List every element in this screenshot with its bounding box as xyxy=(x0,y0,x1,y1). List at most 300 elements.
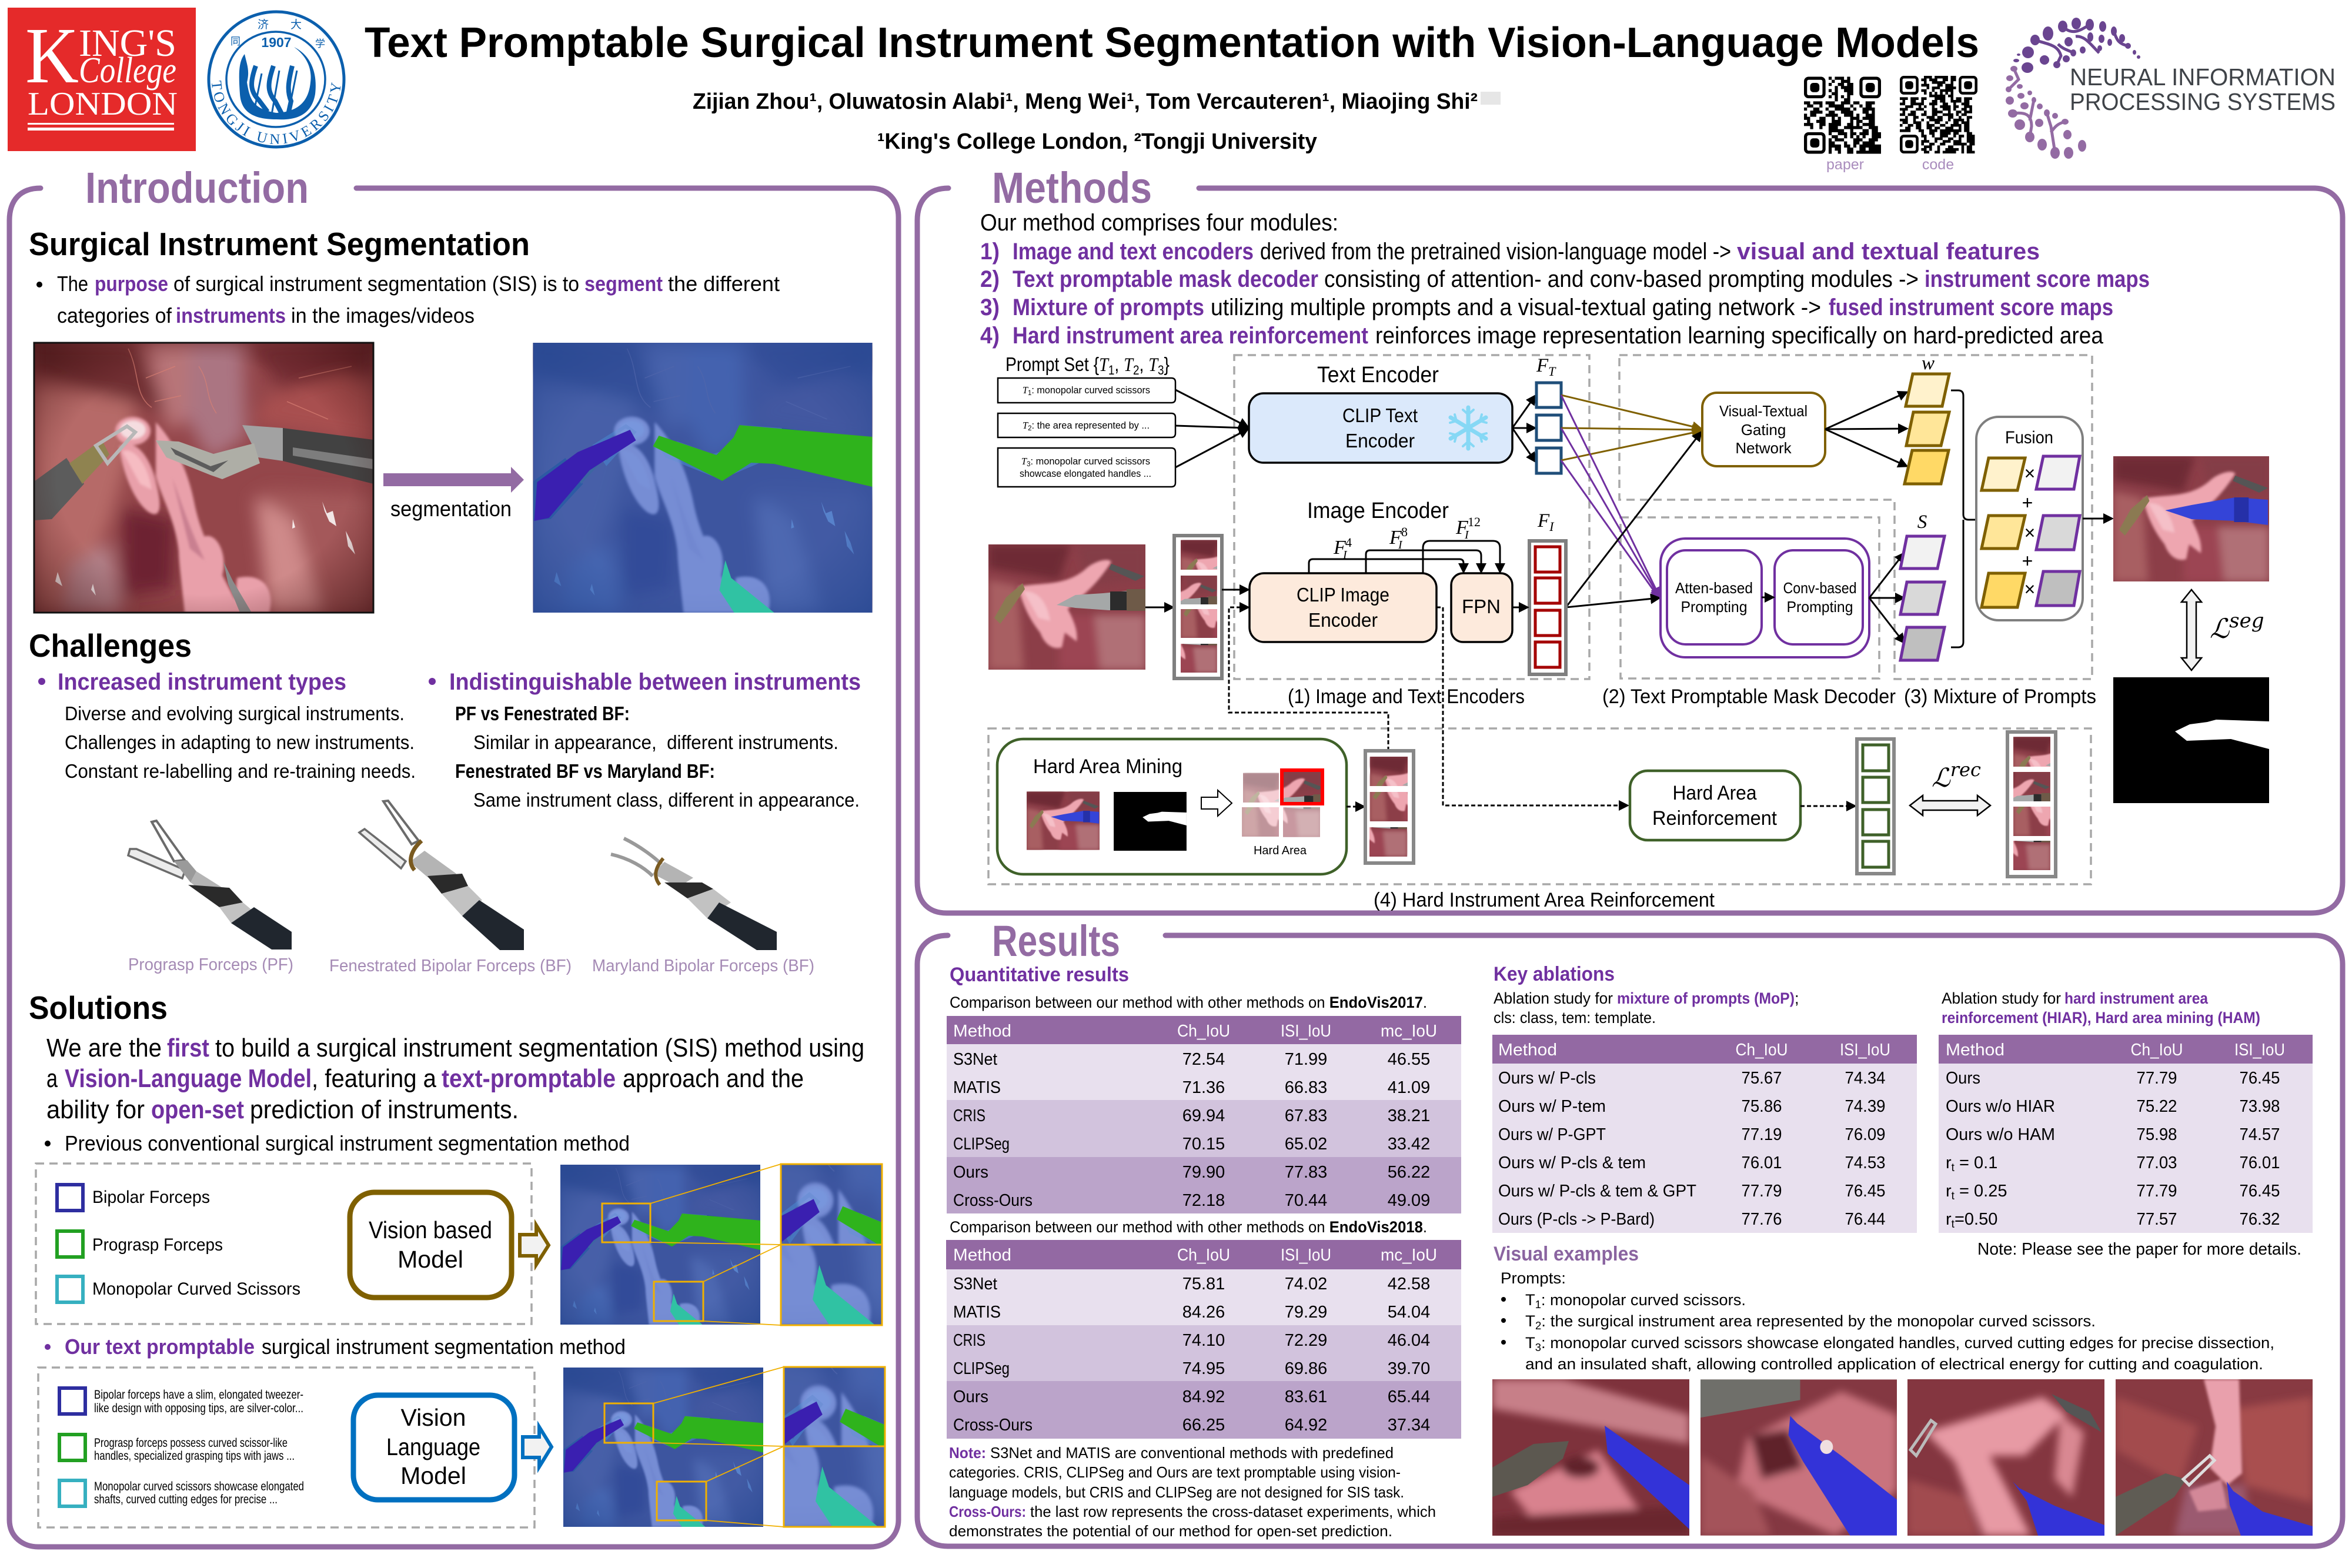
table: HIAR ablation: 75.22 xyxy=(2137,1097,2177,1116)
logo: Tongji University seal: 济 xyxy=(258,16,269,32)
table: HIAR ablation xyxy=(1939,1035,2313,1233)
table: EndoVis2017 xyxy=(947,1016,1461,1213)
logo: King's College London xyxy=(8,8,196,151)
table: HIAR ablation: t xyxy=(1952,1218,1955,1231)
text: purpose bullet: purpose xyxy=(95,272,168,296)
logo: King's College London: K xyxy=(25,12,79,100)
caption: HIAR ablation: reinforcement (HIAR), Hard area mining (HAM) xyxy=(1942,1009,2260,1027)
panel outline xyxy=(917,188,2343,913)
legend: conventional classes xyxy=(57,1185,300,1302)
label: prompt set: , xyxy=(1114,353,1124,375)
affiliations: ¹King's College London, ²Tongji University xyxy=(877,129,1317,154)
table: EndoVis2018: ISI_IoU xyxy=(1281,1246,1331,1265)
table: EndoVis2017: Cross-Ours xyxy=(953,1191,1033,1210)
text: indistinguishable between instruments: Same instrument class, different in appearance. xyxy=(473,789,860,811)
image: visual example 2 xyxy=(1700,1379,1897,1536)
text: module list: Image and text encoders xyxy=(1013,239,1254,265)
logo: King's College London: ING'S xyxy=(79,22,176,65)
arrow: mining to crops xyxy=(1347,805,1364,808)
table: MoP ablation: Ours w/ P-cls & tem xyxy=(1498,1154,1646,1172)
logo: King's College London: College xyxy=(79,51,176,91)
score maps S xyxy=(1900,536,1945,660)
arrow: fusion to prediction xyxy=(2083,517,2112,520)
image: conventional segmentation with zooms xyxy=(560,1015,1058,1425)
legend: text prompts: like design with opposing tips, are silver-color... xyxy=(94,1402,303,1415)
legend: text prompts xyxy=(59,1388,304,1506)
table: EndoVis2018: 83.61 xyxy=(1285,1388,1327,1406)
text: solution summary: Vision-Language Model xyxy=(65,1064,312,1093)
caption: HIAR ablation xyxy=(1942,989,2260,1027)
table: EndoVis2018: Cross-Ours xyxy=(953,1416,1033,1435)
text: prompts list xyxy=(1501,1269,2274,1373)
legend: text prompts: Bipolar forceps have a slim, elongated tweezer- xyxy=(94,1388,303,1402)
table: EndoVis2018: CLIPSeg xyxy=(953,1359,1010,1378)
arrow: reinforcement to features xyxy=(1800,805,1855,807)
box: fusion: × xyxy=(2024,463,2035,484)
text: purpose bullet: categories of xyxy=(57,303,172,327)
table: EndoVis2017: 69.94 xyxy=(1182,1106,1225,1125)
legend: conventional classes: Prograsp Forceps xyxy=(92,1235,223,1255)
box: visual-textual gating network xyxy=(1702,393,1825,466)
box: prompting modules: Conv-based xyxy=(1783,579,1857,597)
table: EndoVis2018: 64.92 xyxy=(1285,1416,1327,1435)
table: EndoVis2017: 71.99 xyxy=(1285,1050,1327,1069)
text: solution summary: a xyxy=(46,1064,58,1093)
crop stack xyxy=(1144,536,1254,678)
prompt texts: showcase elongated handles ... xyxy=(1020,468,1151,479)
feature stack: reinforcement xyxy=(1857,739,1894,874)
table: HIAR ablation: Ours xyxy=(1946,1069,1980,1088)
text: indistinguishable between instruments: Similar in appearance, different instruments. xyxy=(473,731,838,753)
text: solution summary: approach and the xyxy=(623,1064,804,1093)
diagram: conventional method xyxy=(36,1164,549,1324)
arrow: FPN to features xyxy=(1512,607,1528,608)
labels: multi-scale features: F xyxy=(1389,527,1402,549)
table: MoP ablation: Ours w/ P-cls & tem & GPT xyxy=(1498,1182,1696,1201)
label: image encoder: Image Encoder xyxy=(1307,499,1449,523)
table: HIAR ablation: 75.98 xyxy=(2137,1125,2177,1144)
labels: forceps types: Maryland Bipolar Forceps (BF) xyxy=(592,957,814,975)
text: solution summary: open-set xyxy=(151,1095,244,1124)
label: L seg: ℒ xyxy=(2210,613,2229,644)
brace xyxy=(1951,390,1976,647)
label: prompt set: T xyxy=(1148,355,1159,376)
text: results note: demonstrates the potential of our method for open-set prediction. xyxy=(949,1522,1392,1540)
panel: Results xyxy=(917,917,2343,1546)
logo: Neural Information Processing Systems: PROCESSING SYSTEMS xyxy=(2070,88,2336,115)
table: MoP ablation: 76.44 xyxy=(1845,1210,1885,1229)
prompt texts: : monopolar curved scissors xyxy=(1031,385,1150,396)
table: HIAR ablation: r xyxy=(1946,1210,1952,1229)
labels: module captions xyxy=(1288,686,2096,708)
table: EndoVis2017: 49.09 xyxy=(1388,1191,1430,1210)
table: EndoVis2018: 74.95 xyxy=(1182,1359,1225,1378)
prompt texts: T xyxy=(1023,420,1029,431)
arrows: prompts to text encoder xyxy=(1175,390,1248,467)
caption: EndoVis2017: Comparison between our method with other methods on EndoVis2017. xyxy=(950,994,1427,1011)
table: EndoVis2018: 72.29 xyxy=(1285,1331,1327,1350)
lines: text features to prompting xyxy=(1561,395,1659,599)
text: purpose bullet: the different xyxy=(668,272,780,296)
text: module list: Our method comprises four modules: xyxy=(980,210,1338,236)
table: MoP ablation: 74.39 xyxy=(1845,1097,1885,1116)
illustration: Maryland Bipolar Forceps xyxy=(611,838,777,950)
caption: EndoVis2018: Comparison between our method with other methods on EndoVis2018. xyxy=(950,1218,1427,1236)
text: our method bullet xyxy=(45,1335,626,1359)
table: MoP ablation: 74.53 xyxy=(1845,1154,1885,1172)
table: EndoVis2017: MATIS xyxy=(953,1078,1001,1097)
caption: MoP ablation: mixture of prompts (MoP) xyxy=(1617,989,1795,1007)
box: vision language model: Language xyxy=(386,1433,480,1460)
logo: Tongji University seal: 大 xyxy=(290,16,302,32)
table: MoP ablation: 74.34 xyxy=(1845,1069,1885,1088)
table: EndoVis2017: 71.36 xyxy=(1182,1078,1225,1097)
table: EndoVis2017: 66.83 xyxy=(1285,1078,1327,1097)
text: indistinguishable between instruments: Indistinguishable between instruments xyxy=(449,669,861,695)
text: prompts list: 3 xyxy=(1535,1342,1541,1353)
box: vision language model: Vision xyxy=(401,1404,466,1431)
table: EndoVis2017: 70.44 xyxy=(1285,1191,1327,1210)
logo: Tongji University seal: 1907 xyxy=(261,35,292,50)
text: module list xyxy=(980,210,2150,349)
table: MoP ablation: 77.79 xyxy=(1742,1182,1782,1201)
table: MoP ablation: 77.19 xyxy=(1742,1125,1782,1144)
table: HIAR ablation: Method xyxy=(1946,1041,2004,1059)
heading: Key ablations: Key ablations xyxy=(1494,963,1615,985)
box: hard area reinforcement: Hard Area xyxy=(1672,782,1757,804)
text: our method bullet: Our text promptable xyxy=(65,1335,255,1359)
image: visual example 3 xyxy=(1907,1379,2104,1536)
legend: text prompts: handles, specialized grasping tips with jaws ... xyxy=(94,1449,295,1463)
arrow: crops to encoder xyxy=(1222,589,1248,590)
text: our method bullet: surgical instrument segmentation method xyxy=(262,1335,626,1359)
box: visual-textual gating network: Visual-Textual xyxy=(1719,402,1808,420)
labels: multi-scale features: F xyxy=(1333,537,1347,559)
arrow: image to crops xyxy=(1145,607,1173,608)
text: module list: Hard instrument area reinforcement xyxy=(1013,323,1368,349)
prompt texts: T xyxy=(1021,456,1028,467)
table: HIAR ablation: r xyxy=(1946,1182,1952,1201)
table: EndoVis2017: CRIS xyxy=(953,1106,985,1125)
title: Text Promptable Surgical Instrument Segmentation with Vision-Language Models xyxy=(365,19,1979,66)
labels: multi-scale features: I xyxy=(1464,529,1469,541)
labels: multi-scale features xyxy=(1333,514,1481,561)
text: solution summary xyxy=(46,1034,864,1124)
text: purpose bullet: The xyxy=(57,272,88,296)
label: F_I: I xyxy=(1549,519,1555,534)
table: EndoVis2017: Ch_IoU xyxy=(1177,1022,1230,1041)
box: fusion: + xyxy=(2022,550,2033,571)
label: module 4 caption: (4) Hard Instrument Area Reinforcement xyxy=(1374,889,1715,911)
table: EndoVis2017: mc_IoU xyxy=(1381,1022,1437,1041)
box: hard area reinforcement xyxy=(1630,771,1800,840)
lines: text features to gating network xyxy=(1561,395,1701,460)
table: EndoVis2017: ISI_IoU xyxy=(1281,1022,1331,1041)
text: module list: 2) xyxy=(980,266,1000,292)
box: vision based model: Model xyxy=(397,1246,463,1273)
box: vision language model xyxy=(353,1395,514,1500)
table: HIAR ablation: =0.50 xyxy=(1955,1210,1997,1229)
heading: Visual examples: Visual examples xyxy=(1494,1243,1639,1265)
box: vision language model: Model xyxy=(400,1462,466,1489)
labels: multi-scale features: F xyxy=(1455,517,1469,539)
table: HIAR ablation: 76.45 xyxy=(2239,1069,2280,1088)
illustration: Fenestrated Bipolar Forceps xyxy=(359,801,524,950)
table: EndoVis2018: 75.81 xyxy=(1182,1275,1225,1293)
text: purpose bullet: in the images/videos xyxy=(291,303,475,327)
image: visual example 1 xyxy=(1492,1379,1689,1536)
QR labels xyxy=(1826,156,1954,173)
labels: multi-scale features: 8 xyxy=(1401,524,1408,539)
table: MoP ablation: 75.86 xyxy=(1742,1097,1782,1116)
label: prompt set: } xyxy=(1164,353,1170,375)
prompt texts: T xyxy=(1023,385,1028,396)
weight maps w xyxy=(1905,374,1949,484)
text: solution summary: , featuring a xyxy=(312,1064,436,1093)
text: increased instrument types: Diverse and evolving surgical instruments. xyxy=(65,703,405,724)
text: indistinguishable between instruments: PF vs Fenestrated BF: xyxy=(455,703,630,724)
table: HIAR ablation: 77.57 xyxy=(2137,1210,2177,1229)
table: MoP ablation: Ours w/ P-tem xyxy=(1498,1097,1606,1116)
labels: multi-scale features: 12 xyxy=(1468,514,1481,529)
label: L rec: rec xyxy=(1950,758,1981,781)
label: prompt set: 3 xyxy=(1158,363,1164,377)
image: segmented scene xyxy=(533,343,873,613)
table: EndoVis2018: 84.26 xyxy=(1182,1303,1225,1322)
panel outline xyxy=(917,935,2343,1546)
table: EndoVis2018: 65.44 xyxy=(1388,1388,1430,1406)
table: HIAR ablation: 73.98 xyxy=(2239,1097,2280,1116)
caption: MoP ablation xyxy=(1494,989,1799,1027)
table: EndoVis2017: Method xyxy=(953,1022,1011,1041)
feature squares: F_T xyxy=(1536,383,1561,473)
table: EndoVis2017: CLIPSeg xyxy=(953,1135,1010,1154)
text: solution summary: ability for xyxy=(46,1095,145,1124)
text: solution summary: We are the xyxy=(46,1034,162,1062)
text: increased instrument types: Increased instrument types xyxy=(58,669,346,695)
table: EndoVis2017: 38.21 xyxy=(1388,1106,1430,1125)
arrows: text encoder to features xyxy=(1512,396,1535,462)
table: HIAR ablation: 74.57 xyxy=(2239,1125,2280,1144)
text: prompts list: 1 xyxy=(1535,1299,1541,1310)
table: MoP ablation: 76.45 xyxy=(1845,1182,1885,1201)
label: prompt set: Prompt Set {T xyxy=(1005,353,1114,376)
table: EndoVis2017: Ours xyxy=(953,1163,988,1182)
table: EndoVis2018: 37.34 xyxy=(1388,1416,1430,1435)
heading: Challenges: Challenges xyxy=(29,627,192,664)
image: input scene xyxy=(988,544,1145,670)
table: EndoVis2017: 33.42 xyxy=(1388,1135,1430,1154)
label: prompt set: , xyxy=(1139,353,1148,375)
image: ground-truth mask xyxy=(2113,677,2269,803)
labels: forceps types: Fenestrated Bipolar Forceps (BF) xyxy=(329,957,572,975)
authors: Zijian Zhou¹, Oluwatosin Alabi¹, Meng Wei¹, Tom Vercauteren¹, Miaojing Shi² xyxy=(693,89,1478,114)
caption: MoP ablation: Ablation study for xyxy=(1494,989,1613,1007)
labels: multi-scale features: 4 xyxy=(1345,535,1352,550)
box: fusion: × xyxy=(2024,522,2035,543)
text: module list: reinforces image representation learning specifically on hard-predicted area xyxy=(1375,323,2104,349)
table: HIAR ablation: 76.01 xyxy=(2239,1154,2280,1172)
box: prompting modules: Prompting xyxy=(1681,598,1748,616)
table: HIAR ablation: Ch_IoU xyxy=(2131,1041,2183,1059)
crop stack: hard area xyxy=(1333,751,1444,863)
illustration: Prograsp Forceps xyxy=(128,821,292,950)
table: MoP ablation: 75.67 xyxy=(1742,1069,1782,1088)
table: EndoVis2018: Method xyxy=(953,1246,1011,1265)
text: module list: fused instrument score maps xyxy=(1829,295,2113,320)
table: HIAR ablation: t xyxy=(1952,1162,1955,1174)
text: prompts list: T xyxy=(1525,1312,1535,1330)
legend: text prompts: Prograsp forceps possess curved scissor-like xyxy=(94,1436,288,1450)
text: results note: the last row represents the cross-dataset experiments, which xyxy=(1030,1503,1436,1520)
box: fusion: × xyxy=(2024,579,2035,600)
table: EndoVis2018: 54.04 xyxy=(1388,1303,1430,1322)
table: HIAR ablation: = 0.25 xyxy=(1955,1182,2007,1201)
prompt texts: 1 xyxy=(1028,389,1032,397)
labels: module captions: (2) Text Promptable Mask Decoder xyxy=(1602,686,1896,708)
table: EndoVis2018: S3Net xyxy=(953,1275,997,1293)
labels: module captions: (3) Mixture of Prompts xyxy=(1904,686,2096,708)
QR labels: paper xyxy=(1826,156,1864,173)
box: fusion: + xyxy=(2022,492,2033,513)
table: EndoVis2018: Ch_IoU xyxy=(1177,1246,1230,1265)
label: F_I: F xyxy=(1538,510,1549,531)
text: module list: 1) xyxy=(980,239,1000,265)
table: EndoVis2018: 42.58 xyxy=(1388,1275,1430,1293)
labels: forceps types: Prograsp Forceps (PF) xyxy=(128,955,293,974)
image: text promptable segmentation with zooms xyxy=(563,1216,1061,1568)
table: EndoVis2017: 72.54 xyxy=(1182,1050,1225,1069)
image: prediction output xyxy=(2113,456,2269,581)
table: EndoVis2017: 46.55 xyxy=(1388,1050,1430,1069)
caption: HIAR ablation: Ablation study for xyxy=(1942,989,2061,1007)
box: hard area mining: Hard Area Mining xyxy=(1033,755,1182,778)
box: vision based model: Vision based xyxy=(369,1216,492,1243)
text: increased instrument types xyxy=(38,669,416,782)
box: CLIP image encoder xyxy=(1250,573,1436,642)
logo: Tongji University seal: 同 xyxy=(230,33,240,48)
text: module list: derived from the pretrained vision-language model -> xyxy=(1260,239,1731,265)
table: MoP ablation: Ch_IoU xyxy=(1736,1041,1788,1059)
panel: Methods xyxy=(917,163,2343,913)
text: results note xyxy=(949,1444,1436,1540)
table: HIAR ablation: r xyxy=(1946,1154,1952,1172)
text: purpose bullet: segment xyxy=(584,272,663,296)
text: module list: 4) xyxy=(980,323,1000,349)
logo: Neural Information Processing Systems xyxy=(2006,18,2336,159)
box: CLIP text encoder: CLIP Text xyxy=(1342,404,1418,426)
panel outline xyxy=(9,188,898,1547)
box: hard area mining xyxy=(997,739,1347,874)
heading: Introduction: Introduction xyxy=(85,163,309,212)
text: increased instrument types: Constant re-labelling and re-training needs. xyxy=(65,760,416,782)
box: fusion xyxy=(1976,417,2083,620)
table: EndoVis2018: CRIS xyxy=(953,1331,985,1350)
caption: MoP ablation: ; xyxy=(1795,989,1799,1007)
arrow: segmentation loss xyxy=(2181,590,2201,670)
box: FPN xyxy=(1451,573,1512,642)
diagram: module dashed frames xyxy=(988,355,2092,884)
icon: email xyxy=(1481,92,1501,105)
table: EndoVis2018 xyxy=(946,1240,1461,1439)
text: prompts list: 2 xyxy=(1535,1320,1541,1332)
text: indistinguishable between instruments: Fenestrated BF vs Maryland BF: xyxy=(455,760,715,782)
note: see paper: Note: Please see the paper for more details. xyxy=(1977,1240,2301,1259)
box: hard area reinforcement: Reinforcement xyxy=(1652,807,1778,830)
box: FPN: FPN xyxy=(1462,596,1501,617)
table: EndoVis2018: 84.92 xyxy=(1182,1388,1225,1406)
table: HIAR ablation: ISI_IoU xyxy=(2234,1041,2285,1059)
table: EndoVis2018: Ours xyxy=(953,1388,988,1406)
box: prompting modules: Atten-based xyxy=(1675,579,1753,597)
table: MoP ablation: ISI_IoU xyxy=(1840,1041,1890,1059)
QR labels: code xyxy=(1922,156,1954,173)
caption: MoP ablation: cls: class, tem: template. xyxy=(1494,1009,1656,1027)
diagram: text promptable method xyxy=(38,1368,552,1527)
logo: King's College London: LONDON xyxy=(28,86,178,122)
arrows: gating outputs xyxy=(1825,392,1907,466)
text: module list: utilizing multiple prompts and a visual-textual gating network -> xyxy=(1211,295,1821,320)
table: HIAR ablation: 77.79 xyxy=(2137,1182,2177,1201)
text: previous method bullet: Previous conventional surgical instrument segmentation method xyxy=(65,1131,630,1155)
label: prompt set: 2 xyxy=(1133,363,1139,377)
logo: Tongji University seal xyxy=(207,11,346,148)
text: prompts list: : the surgical instrument area represented by the monopolar curved scissors. xyxy=(1541,1312,2096,1330)
box: hard area mining: Hard Area xyxy=(1254,844,1307,857)
table: HIAR ablation: Ours w/o HIAR xyxy=(1946,1097,2055,1116)
text: module list: consisting of attention- and conv-based prompting modules -> xyxy=(1324,266,1919,292)
text: purpose bullet xyxy=(36,272,780,327)
label: S: S xyxy=(1917,511,1927,533)
box: prompting modules: Prompting xyxy=(1786,598,1853,616)
label: L rec: ℒ xyxy=(1932,763,1950,793)
text: solution summary: text-promptable xyxy=(442,1064,616,1093)
caption: HIAR ablation: hard instrument area xyxy=(2064,989,2209,1007)
heading: Solutions: Solutions xyxy=(29,989,168,1026)
arrow: to conventional output xyxy=(520,1225,549,1265)
text: module list: Mixture of prompts xyxy=(1013,295,1204,320)
text: results note: Note: xyxy=(949,1444,986,1462)
text: results note: categories. CRIS, CLIPSeg and Ours are text promptable using vision- xyxy=(949,1463,1401,1481)
arrow: reconstruction loss xyxy=(1910,795,1990,815)
logo: Neural Information Processing Systems: NEURAL INFORMATION xyxy=(2070,63,2336,91)
legend: text prompts: shafts, curved cutting edges for precise ... xyxy=(94,1493,278,1506)
text: results note: Cross-Ours: xyxy=(949,1503,1026,1520)
image: surgical scene input xyxy=(34,343,373,613)
lines: image features xyxy=(1566,432,1701,607)
table: EndoVis2018: 66.25 xyxy=(1182,1416,1225,1435)
text: prompts list: T xyxy=(1525,1334,1535,1352)
table: EndoVis2017: 41.09 xyxy=(1388,1078,1430,1097)
logo: Tongji University seal: TONGJI UNIVERSITY xyxy=(212,81,341,144)
text: results note: language models, but CRIS and CLIPSeg are not designed for SIS task. xyxy=(949,1483,1404,1501)
panel: Introduction xyxy=(9,163,1061,1568)
box: fusion: Fusion xyxy=(2005,428,2053,447)
text: purpose bullet: of surgical instrument segmentation (SIS) is to xyxy=(173,272,579,296)
table: EndoVis2017: 72.18 xyxy=(1182,1191,1225,1210)
text: solution summary: to build a surgical instrument segmentation (SIS) method using xyxy=(215,1034,864,1062)
feature stack: F_I xyxy=(1529,541,1566,674)
table: HIAR ablation: Ours w/o HAM xyxy=(1946,1125,2055,1144)
table: EndoVis2017: S3Net xyxy=(953,1050,997,1069)
labels: forceps types xyxy=(128,955,814,975)
box: CLIP text encoder xyxy=(1249,393,1512,463)
text: prompts list: and an insulated shaft, allowing controlled application of electrical energy for cutting and coagulation. xyxy=(1525,1355,2263,1373)
table: MoP ablation: Ours w/ P-GPT xyxy=(1498,1125,1606,1144)
table: EndoVis2018: 79.29 xyxy=(1285,1303,1327,1322)
table: EndoVis2018: MATIS xyxy=(953,1303,1001,1322)
dashed route: encoder to reinforcement xyxy=(1436,607,1628,805)
